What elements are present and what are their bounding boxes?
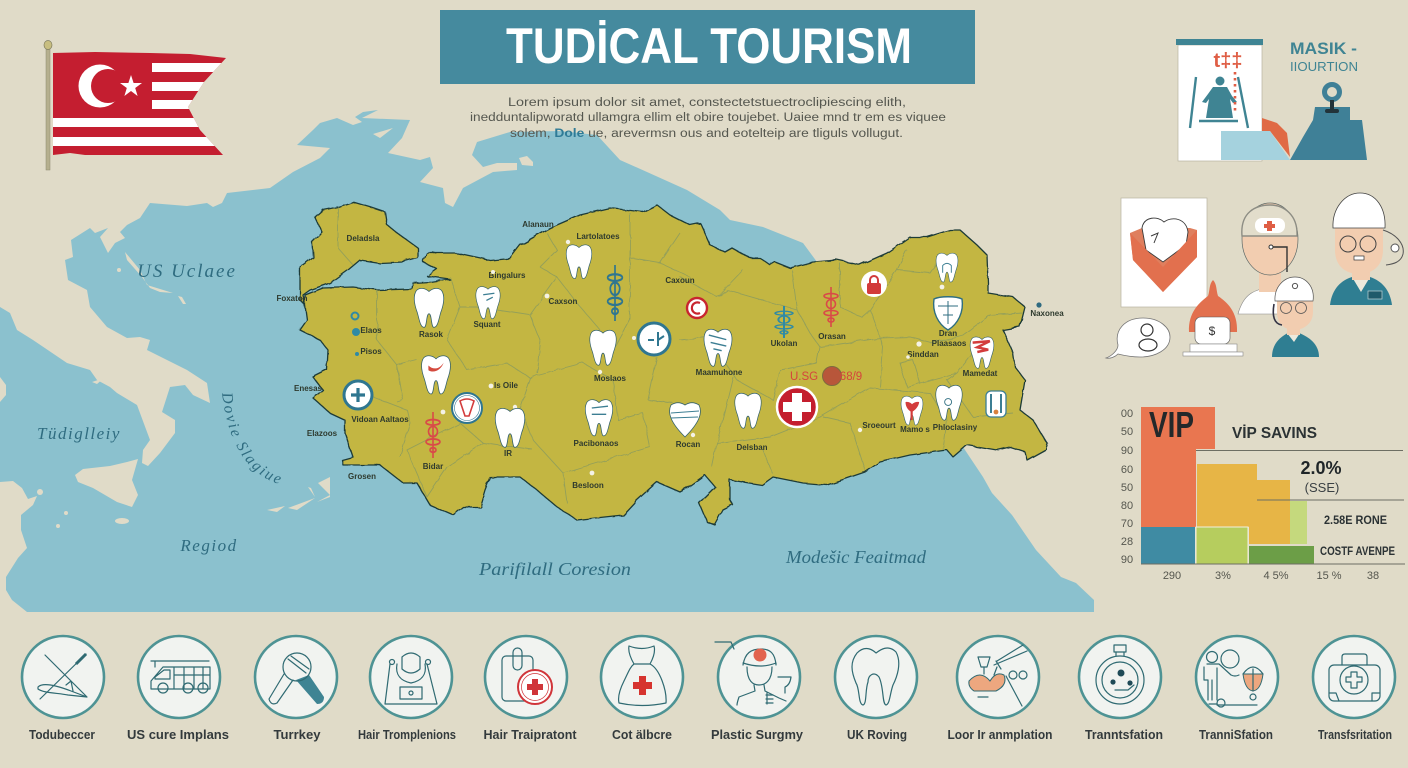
chart labels: 290: [1163, 570, 1181, 582]
chart labels: 2.58E RONE: [1324, 513, 1387, 527]
price callout on map: U.SG: [790, 371, 818, 383]
map place labels: Deladsla: [347, 234, 380, 243]
map place labels: Caxoun: [665, 276, 695, 285]
price callout on map: 68/9: [840, 371, 862, 383]
sea labels: US Uclaee: [137, 261, 237, 282]
service icon: magnifier: [255, 636, 337, 742]
icons: teeth on map: [414, 245, 1006, 447]
map place labels: Mamedat: [963, 369, 998, 378]
service icon: bag with mirror: [358, 636, 456, 742]
flag of Turkey: [44, 40, 232, 170]
y axis labels: 00: [1121, 408, 1133, 420]
chart labels: 3%: [1215, 570, 1231, 582]
sea labels: Modešic Feaitmad: [785, 547, 927, 567]
y axis labels: 70: [1121, 518, 1133, 530]
island: Sicily: [75, 459, 138, 507]
service icon: sack with cross: Cot älbcre: [612, 728, 672, 742]
service icon: bag with mirror: Hair Tromplenions: [358, 728, 456, 742]
intro text: [470, 97, 946, 140]
panel: risk poster and weight: IIOURTION: [1290, 59, 1358, 74]
map place labels: Caxson: [549, 297, 578, 306]
y axis labels: [1121, 408, 1133, 566]
y axis labels: 60: [1121, 464, 1133, 476]
map place labels: Rasok: [419, 330, 444, 339]
map place labels: Mamo s: [900, 425, 930, 434]
map place labels: Foxaton: [276, 294, 308, 303]
map place labels: Orasan: [818, 332, 846, 341]
orange dome cost bell: [1183, 280, 1243, 356]
chart labels: 15 %: [1316, 570, 1342, 582]
map place labels: Grosen: [348, 472, 376, 481]
chart labels: (SSE): [1305, 480, 1339, 495]
map place labels: Sinddan: [907, 350, 939, 359]
map place labels: Enesas: [294, 384, 323, 393]
chart labels: VIP: [1149, 404, 1194, 445]
map place labels: Alanaun: [522, 220, 554, 229]
map place labels: Phloclasiny: [933, 423, 978, 432]
map place labels: Sroeourt: [862, 421, 896, 430]
map place labels: Maamuhone: [696, 368, 743, 377]
y axis labels: 28: [1121, 536, 1133, 548]
icons: badges on map: [344, 271, 1042, 427]
title banner: [440, 10, 975, 84]
service icon: laser tools: Loor Ir anmplation: [948, 728, 1052, 742]
service icon: clipboard with cross: [484, 636, 577, 742]
service icon: bus: [127, 636, 229, 742]
service icon: tobacco: Todubeccer: [29, 728, 95, 742]
map place labels: Squant: [473, 320, 501, 329]
map place labels: Is Oile: [494, 381, 519, 390]
map place labels: Elazoos: [307, 429, 338, 438]
clinician with headset: [1238, 203, 1298, 314]
y axis labels: 90: [1121, 445, 1133, 457]
service icon: magnifier: Turrkey: [274, 728, 321, 742]
panel: dental staff illustrations: [1106, 193, 1403, 358]
surgeon with stethoscope: [1330, 193, 1403, 305]
panel: risk poster and weight: t‡‡: [1214, 50, 1242, 72]
islands: small scattered land: [0, 128, 533, 528]
title banner: TUDİCAL TOURISM: [506, 18, 912, 74]
y axis labels: 50: [1121, 482, 1133, 494]
service icon: tobacco: [22, 636, 104, 742]
sea map background: [0, 110, 1094, 612]
chart labels: 4 5%: [1263, 570, 1289, 582]
chart labels: 2.0%: [1300, 458, 1342, 478]
price callout on map: [790, 366, 862, 386]
speech bubble: [1106, 318, 1170, 358]
chart labels: [1149, 404, 1395, 582]
y axis labels: 90: [1121, 554, 1133, 566]
card with tooth in pocket: [1121, 198, 1207, 307]
service icon: plastic surgeon: [711, 636, 803, 742]
service icon: patient and doctor: TranniSfation: [1199, 728, 1273, 742]
dentist: [1272, 277, 1319, 357]
y axis labels: 50: [1121, 426, 1133, 438]
intro text: Lorem ipsum dolor sit amet, constectetstuectroclipiescing elith,: [508, 97, 906, 109]
service icon: medical case: Transfsritation: [1318, 728, 1392, 742]
bar chart: VIP savings: [1121, 404, 1405, 582]
panel: risk poster and weight: MASIK -: [1290, 39, 1357, 58]
service icon: medical case: [1313, 636, 1395, 742]
map place labels: Naxonea: [1030, 309, 1064, 318]
service icon: plastic surgeon: Plastic Surgmy: [711, 728, 803, 742]
map location dots: [441, 240, 944, 475]
map: Turkey: [300, 202, 1047, 525]
panel: risk poster and weight: [1176, 39, 1367, 161]
service icon: clipboard with cross: Hair Traipratont: [484, 728, 577, 742]
map place labels: Delsban: [736, 443, 768, 452]
map place labels: IR: [504, 449, 512, 458]
sea labels: Dovie Slagiue: [222, 393, 281, 484]
intro text: inedduntalipworatd ullamgra ellim elt obire toujebet. Uaiee mnd tr em es viquee: [470, 112, 946, 124]
map place labels: Bidar: [423, 462, 443, 471]
sea labels: Regiod: [179, 536, 238, 555]
map place labels: Dran: [939, 329, 957, 338]
service icon: dial: Tranntsfation: [1085, 728, 1163, 742]
sea labels: Tüdiglleiy: [37, 424, 121, 443]
map place labels: Ukolan: [771, 339, 797, 348]
map place labels: Besloon: [572, 481, 604, 490]
intro text: solem, Dole ue, arevermsn ous and eotelteip are tliguls vollugut.: [510, 128, 903, 140]
orange dome cost bell: $: [1209, 324, 1216, 338]
bars: [1141, 407, 1314, 564]
land: Tunisia coast: [0, 481, 37, 612]
chart labels: COSTF AVENPE: [1320, 546, 1395, 558]
map place labels: Lartolatoes: [576, 232, 620, 241]
service icon: bus: US cure Implans: [127, 728, 229, 742]
map place labels: [276, 220, 1064, 490]
map place labels: Pacibonaos: [574, 439, 619, 448]
map place labels: Elaos: [360, 326, 382, 335]
sea labels: [37, 261, 927, 579]
service icon: tooth outline: [835, 636, 917, 742]
map place labels: Bingalurs: [489, 271, 526, 280]
service icon: tooth outline: UK Roving: [847, 728, 907, 742]
service icon: patient and doctor: [1196, 636, 1278, 742]
map place labels: Pisos: [360, 347, 382, 356]
chart labels: 38: [1367, 570, 1379, 582]
map place labels: Rocan: [676, 440, 700, 449]
chart labels: VİP SAVINS: [1232, 424, 1317, 442]
service icon: dial: [1079, 636, 1163, 742]
map place labels: Plaasaos: [932, 339, 967, 348]
map place labels: Vidoan Aaltaos: [351, 415, 409, 424]
service icon: laser tools: [948, 636, 1052, 742]
map place labels: Moslaos: [594, 374, 627, 383]
y axis labels: 80: [1121, 500, 1133, 512]
sea labels: Parifilall Coresion: [478, 559, 631, 579]
service icon: sack with cross: [601, 636, 683, 742]
icons: caduceus symbols: [426, 265, 838, 458]
